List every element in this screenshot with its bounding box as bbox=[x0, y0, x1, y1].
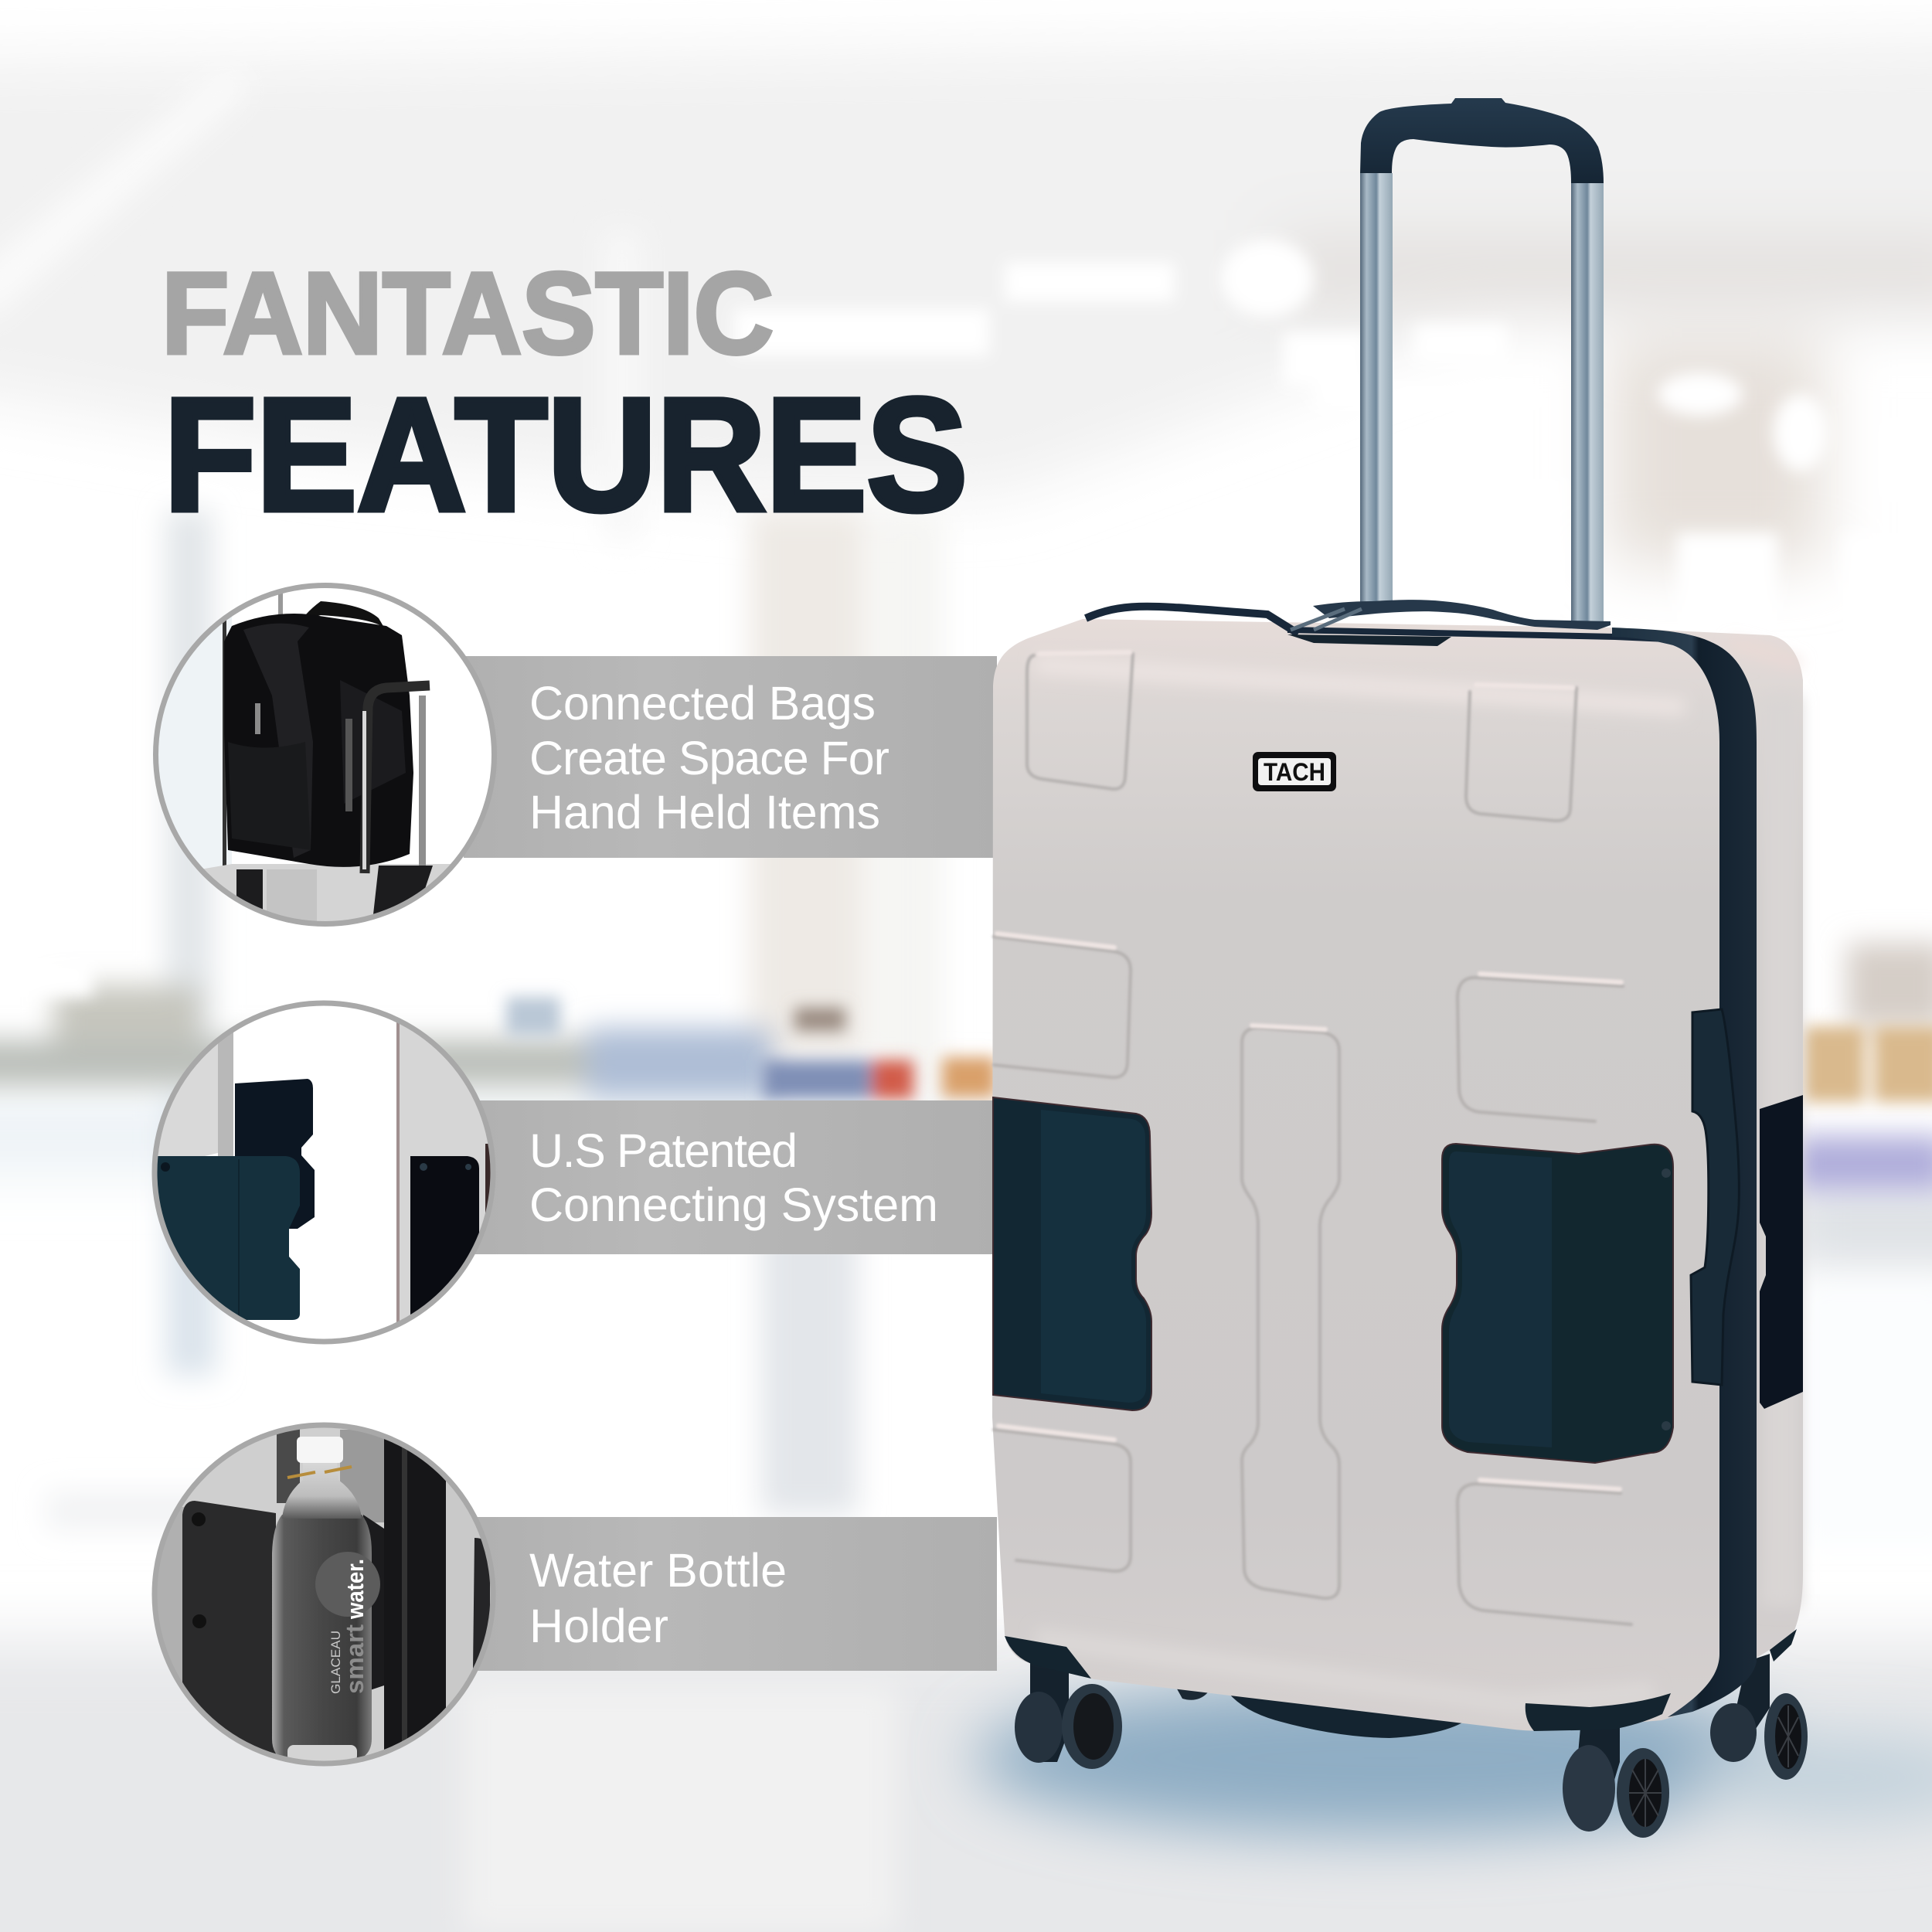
circle photo: water bottle holder bbox=[147, 1418, 502, 1774]
circle photo: backpack on suitcase bbox=[147, 580, 502, 935]
feature text: connected bags: Connected Bags bbox=[529, 677, 876, 730]
bottle label: GLACEAU bbox=[328, 1631, 343, 1694]
shell highlights bbox=[1036, 643, 1801, 1704]
wheels and casters bbox=[1015, 1654, 1808, 1838]
feature text: water bottle: Holder bbox=[529, 1600, 668, 1652]
feature text: connected bags bbox=[529, 677, 889, 838]
feature text: connecting system bbox=[529, 1124, 938, 1231]
heading: Features: FEATURES bbox=[164, 366, 968, 545]
feature text: connecting system: Connecting System bbox=[529, 1179, 938, 1231]
bottle label: smart bbox=[341, 1624, 369, 1694]
corner guards bbox=[1005, 1629, 1797, 1731]
feature text: connecting system: U.S Patented bbox=[529, 1124, 798, 1177]
floor shadow under suitcase bbox=[974, 1681, 1932, 1835]
feature band: connected bags bbox=[464, 656, 997, 858]
rear connector panel bbox=[1760, 1095, 1803, 1409]
circle photo: connector panels bbox=[147, 997, 502, 1352]
feature text: connected bags: Hand Held Items bbox=[529, 786, 880, 838]
brand badge bbox=[1253, 752, 1336, 791]
side zipper bbox=[1612, 628, 1757, 1717]
underside grip bbox=[1228, 1692, 1468, 1738]
shell bbox=[992, 619, 1803, 1731]
feature text: connected bags: Create Space For bbox=[529, 732, 889, 784]
telescoping handle bbox=[1360, 98, 1604, 628]
brand badge: TACH bbox=[1264, 758, 1325, 786]
left connector panel bbox=[993, 1097, 1151, 1410]
suitcase bbox=[992, 98, 1808, 1838]
heading: Fantastic: FANTASTIC bbox=[162, 248, 774, 378]
title bbox=[162, 248, 968, 545]
bottle label bbox=[331, 1560, 363, 1694]
feature text: water bottle: Water Bottle bbox=[529, 1544, 787, 1597]
panel highlights bbox=[997, 652, 1621, 1489]
top zipper and carry handle bbox=[1086, 600, 1685, 646]
embossed panels bbox=[994, 654, 1631, 1624]
feature band: water bottle bbox=[464, 1517, 997, 1671]
right connector panel bbox=[1442, 1144, 1673, 1463]
feature text: water bottle bbox=[529, 1544, 787, 1652]
feature band: connecting system bbox=[464, 1100, 997, 1254]
bottle label: water. bbox=[342, 1559, 369, 1620]
side carry handle bbox=[1691, 1009, 1739, 1385]
